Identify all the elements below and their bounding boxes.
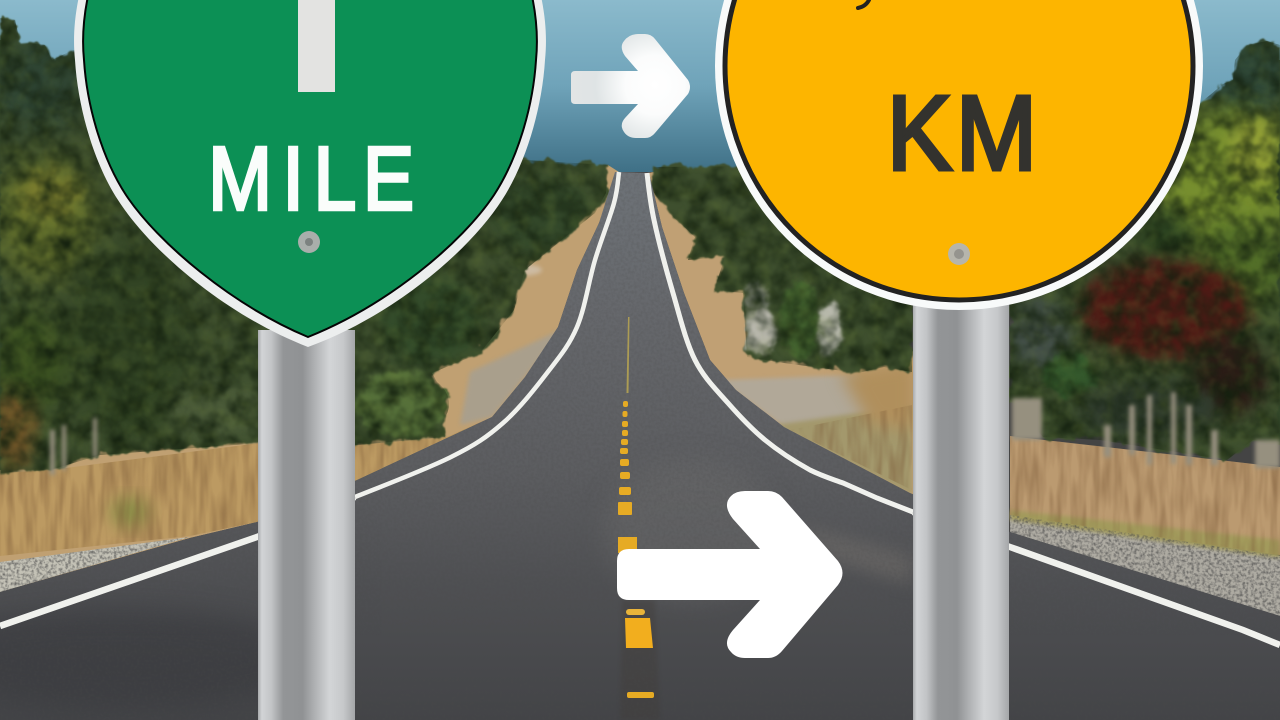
label: KM: KM: [887, 74, 1037, 192]
road: [0, 170, 1280, 720]
green mile sign: [74, 0, 546, 347]
sky: [0, 0, 1280, 172]
bolt: [948, 243, 970, 265]
centre line dashes: [618, 317, 654, 698]
sign border: [715, 0, 1203, 310]
bolt: [298, 231, 320, 253]
fence reeds: [50, 392, 1280, 475]
forests: [0, 0, 1280, 480]
number stem: [298, 0, 335, 92]
left post: [258, 330, 355, 720]
left verge: dirt and dry grass: [0, 165, 619, 592]
bottom arrow: conversion direction: [617, 491, 842, 658]
grass texture: [0, 405, 1280, 555]
number fragment: [858, 0, 869, 8]
right verge: dirt and dry grass: [649, 170, 1280, 616]
forest edge underlay: [0, 40, 1280, 470]
sign face: [725, 0, 1193, 300]
right post: [913, 300, 1009, 720]
sign face: [83, 0, 537, 337]
top arrow: conversion direction: [571, 34, 690, 138]
label: MILE: MILE: [208, 128, 414, 229]
road edge lines: [0, 172, 1280, 645]
gravel texture: [0, 515, 1280, 616]
sign border: [74, 0, 546, 347]
foliage texture: [0, 0, 1280, 480]
yellow km sign: [715, 0, 1203, 310]
